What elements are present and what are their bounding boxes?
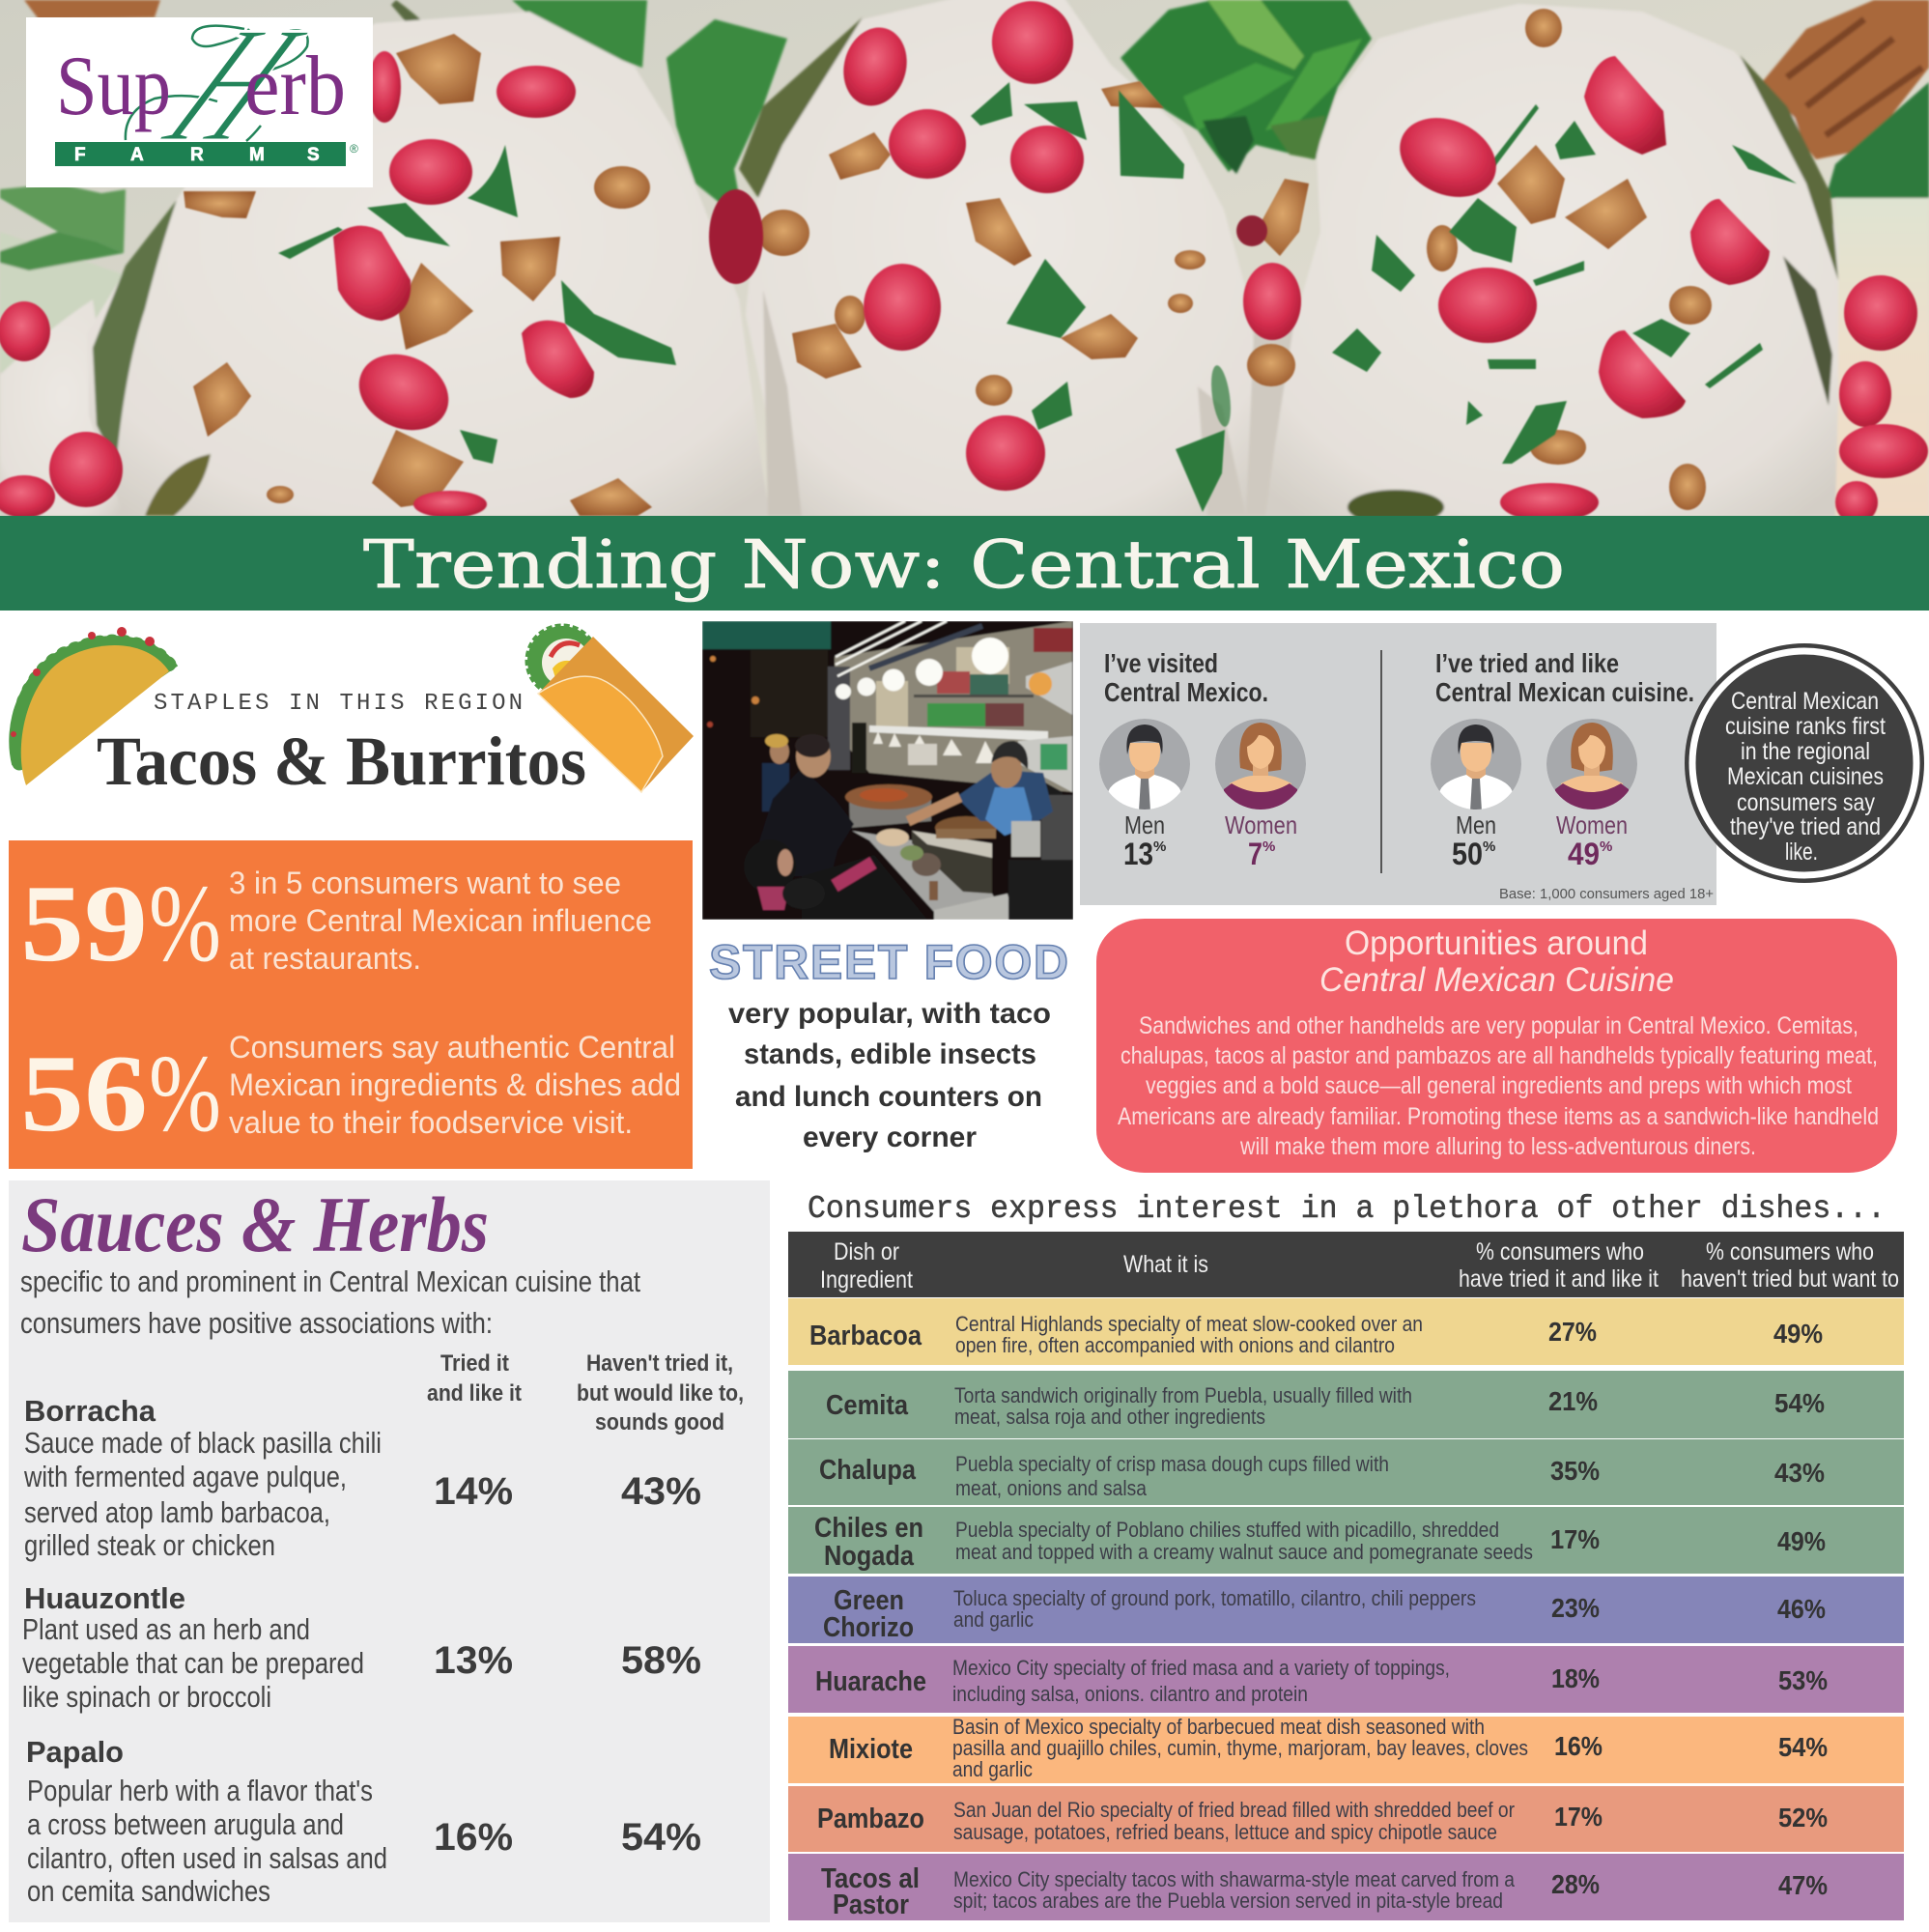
heading: tried and like: I’ve tried and like <box>1435 648 1619 678</box>
row: Huarache: Mexico City specialty of fried masa and a variety of toppings, <box>952 1656 1450 1680</box>
text: street food description: every corner <box>803 1122 977 1153</box>
text: street food description: stands, edible insects <box>744 1038 1036 1070</box>
stat: men visited: % <box>1153 838 1166 855</box>
row: Chalupa: 35% <box>1550 1456 1600 1486</box>
row: Mixiote: Mixiote <box>829 1734 913 1765</box>
row: Huarache: 18% <box>1551 1663 1600 1693</box>
heading: tried and like <box>1435 648 1694 707</box>
callout: ranks first: Mexican cuisines <box>1727 763 1884 790</box>
icon: woman tried <box>1546 719 1637 812</box>
row: Barbacoa: Barbacoa <box>809 1321 922 1351</box>
item: Borracha: 14% <box>434 1470 513 1513</box>
row: Barbacoa: 49% <box>1773 1319 1823 1349</box>
icon: woman visited <box>1215 719 1306 812</box>
chile 3 <box>1261 4 1838 516</box>
heading: Sauces & Herbs <box>21 1180 489 1268</box>
stat: men tried: 50 <box>1452 837 1483 871</box>
row: Mixiote: 54% <box>1778 1732 1828 1762</box>
table header: Ingredient <box>820 1266 913 1293</box>
row: Barbacoa: Central Highlands specialty of meat slow-cooked over an <box>955 1312 1423 1336</box>
item: Papalo: Papalo <box>26 1735 124 1769</box>
item: Papalo: Popular herb with a flavor that's <box>27 1774 373 1807</box>
table header: haven't tried but want to <box>1681 1265 1899 1293</box>
title banner: Trending Now: Central Mexico <box>363 527 1565 604</box>
text: street food description: very popular, with taco <box>728 998 1051 1030</box>
stat: women visited: % <box>1262 838 1275 855</box>
stat: women tried <box>1556 810 1628 871</box>
text: street food description: and lunch counters on <box>735 1081 1042 1113</box>
row: Green Chorizo <box>788 1577 1904 1643</box>
heading: other dishes: Consumers express interest in a plethora of other dishes... <box>808 1191 1886 1227</box>
row: Tacos al Pastor: 47% <box>1778 1870 1828 1900</box>
row: Tacos al Pastor: Mexico City specialty tacos with shawarma-style meat carved from a <box>953 1867 1516 1891</box>
item: Borracha: Borracha <box>24 1394 156 1428</box>
item: Huauzontle <box>22 1581 701 1714</box>
row: Chalupa: Puebla specialty of crisp masa dough cups filled with <box>955 1452 1389 1476</box>
row: Pambazo: 52% <box>1778 1803 1828 1833</box>
row: Pambazo: 17% <box>1554 1802 1603 1832</box>
stat 59%: 3 in 5 consumers want to see <box>229 866 621 900</box>
stat 59%: % <box>149 862 221 984</box>
heading: staples: STAPLES IN THIS REGION <box>154 691 523 717</box>
row: Cemita: Cemita <box>826 1390 909 1421</box>
item: Huauzontle: like spinach or broccoli <box>22 1680 271 1714</box>
row: Green Chorizo: Toluca specialty of ground pork, tomatillo, cilantro, chili peppers <box>953 1586 1476 1610</box>
item: Papalo <box>26 1735 701 1908</box>
stat: men tried <box>1452 810 1496 871</box>
item: Borracha: served atop lamb barbacoa, <box>24 1495 330 1529</box>
stat 59%: at restaurants. <box>229 941 421 976</box>
row: Cemita <box>788 1371 1904 1438</box>
item: Borracha <box>23 1394 701 1562</box>
row: Mixiote: pasilla and guajillo chiles, cumin, thyme, marjoram, bay leaves, cloves <box>952 1736 1528 1760</box>
sauce piece far left <box>0 299 126 516</box>
row: Chiles en Nogada: Chiles en <box>814 1513 923 1544</box>
chile 1 <box>87 12 770 516</box>
row: Pambazo: sausage, potatoes, refried beans, lettuce and spicy chipotle sauce <box>953 1820 1497 1844</box>
row: Chalupa: 43% <box>1774 1458 1825 1488</box>
base note: Base: 1,000 consumers aged 18+ <box>1499 886 1714 902</box>
row: Green Chorizo: 46% <box>1777 1594 1826 1624</box>
row: Huarache: including salsa, onions. cilantro and protein <box>952 1682 1308 1706</box>
callout: ranks first: consumers say <box>1737 789 1875 816</box>
table header <box>788 1232 1904 1297</box>
table header: have tried it and like it <box>1459 1265 1659 1293</box>
chile 2 <box>746 0 1266 516</box>
row: Mixiote <box>788 1715 1904 1783</box>
logo: SupHerb Farms: Sup <box>56 40 171 133</box>
heading: visited <box>1104 648 1268 707</box>
stat: women tried: % <box>1600 838 1612 855</box>
item: Papalo: cilantro, often used in salsas and <box>27 1841 387 1875</box>
stat: women visited <box>1225 810 1297 871</box>
text: street food description <box>728 998 1051 1153</box>
stat: women visited: Women <box>1225 810 1297 839</box>
item: Papalo: a cross between arugula and <box>27 1807 344 1841</box>
callout: ranks first: cuisine ranks first <box>1725 713 1886 740</box>
panel: consumer stats <box>9 840 693 1169</box>
stat 56%: Mexican ingredients & dishes add <box>229 1067 681 1102</box>
row: Tacos al Pastor <box>788 1854 1904 1920</box>
stat: men visited: 13 <box>1123 837 1153 871</box>
icon: man visited <box>1099 719 1190 812</box>
stat: women tried: Women <box>1556 810 1628 839</box>
panel: opportunities: Central Mexican Cuisine <box>1319 961 1674 999</box>
intro text: specific to and prominent in Central Mexican cuisine that <box>20 1264 640 1298</box>
row: Pambazo <box>788 1786 1904 1852</box>
intro text <box>20 1264 640 1340</box>
row: Chiles en Nogada: meat and topped with a creamy walnut sauce and pomegranate seeds <box>955 1540 1533 1564</box>
stat: men visited <box>1123 810 1166 871</box>
callout: ranks first: they've tried and <box>1730 813 1881 840</box>
logo: SupHerb Farms <box>26 0 373 187</box>
row: Barbacoa: 27% <box>1548 1317 1597 1347</box>
title banner <box>0 516 1929 611</box>
row: Chiles en Nogada: Nogada <box>824 1541 915 1572</box>
column headers: sounds good <box>595 1409 724 1435</box>
row: Green Chorizo: 23% <box>1551 1593 1600 1623</box>
stat 59%: more Central Mexican influence <box>229 903 652 938</box>
logo: SupHerb Farms: FARMS <box>74 145 320 165</box>
callout: ranks first <box>1685 643 1924 883</box>
row: Cemita: 21% <box>1548 1386 1598 1416</box>
heading: visited: I’ve visited <box>1104 648 1218 678</box>
hero photo: chiles en nogada <box>0 0 1929 525</box>
heading: tried and like: Central Mexican cuisine. <box>1435 677 1694 707</box>
icon: man tried <box>1431 719 1521 812</box>
icon: taco <box>11 627 173 785</box>
callout: ranks first: like. <box>1785 838 1818 866</box>
stat: men tried: Men <box>1456 810 1496 839</box>
row: Pambazo: San Juan del Rio specialty of fried bread filled with shredded beef or <box>953 1798 1515 1822</box>
row: Mixiote: Basin of Mexico specialty of barbecued meat dish seasoned with <box>952 1715 1485 1739</box>
row: Pambazo: Pambazo <box>817 1804 924 1834</box>
row: Huarache: Huarache <box>815 1666 926 1697</box>
photo: street food stall <box>702 621 1073 920</box>
row: Tacos al Pastor: spit; tacos arabes are the Puebla version served in pita-style bread <box>953 1889 1503 1913</box>
row: Cemita: Torta sandwich originally from Puebla, usually filled with <box>954 1383 1412 1407</box>
item: Huauzontle: Plant used as an herb and <box>22 1612 310 1646</box>
row: Chalupa: meat, onions and salsa <box>955 1476 1148 1500</box>
item: Huauzontle: vegetable that can be prepared <box>22 1646 364 1680</box>
heading: staples <box>97 691 586 800</box>
column headers: Haven't tried it, <box>586 1350 733 1377</box>
stat 56%: Consumers say authentic Central <box>229 1030 675 1065</box>
item: Borracha: with fermented agave pulque, <box>23 1460 347 1493</box>
heading: staples: Tacos & Burritos <box>97 723 586 800</box>
row: Chiles en Nogada: 17% <box>1550 1524 1600 1554</box>
stat: women tried: 49 <box>1568 837 1600 871</box>
row: Tacos al Pastor: Pastor <box>833 1889 909 1920</box>
heading: visited: Central Mexico. <box>1104 677 1268 707</box>
row: Huarache <box>788 1646 1904 1713</box>
row: Tacos al Pastor: Tacos al <box>821 1863 920 1894</box>
item: Papalo: on cemita sandwiches <box>27 1874 270 1908</box>
row: Chalupa: Chalupa <box>819 1455 917 1486</box>
stat 59% <box>20 862 652 984</box>
item: Borracha: Sauce made of black pasilla chili <box>24 1426 382 1460</box>
table header: % consumers who <box>1706 1238 1874 1265</box>
stat: women visited: 7 <box>1248 837 1262 871</box>
logo: SupHerb Farms: ® <box>350 142 358 156</box>
panel: sauces and herbs <box>9 1180 770 1922</box>
stat: men visited: Men <box>1124 810 1165 839</box>
panel: opportunities: will make them more alluring to less-adventurous diners. <box>1239 1133 1756 1160</box>
row: Mixiote: 16% <box>1554 1731 1603 1761</box>
stat 56% <box>20 1030 681 1154</box>
row: Cemita: meat, salsa roja and other ingredients <box>954 1405 1265 1429</box>
item: Papalo: 54% <box>621 1816 701 1859</box>
row: Chiles en Nogada <box>788 1507 1904 1574</box>
column headers <box>427 1350 744 1435</box>
column headers: Tried it <box>440 1350 509 1377</box>
heading: street food: STREET FOOD <box>709 935 1068 989</box>
item: Huauzontle: 58% <box>621 1639 701 1682</box>
intro text: consumers have positive associations with: <box>20 1306 493 1340</box>
row: Mixiote: and garlic <box>952 1757 1033 1781</box>
row: Tacos al Pastor: 28% <box>1551 1869 1600 1899</box>
row: Barbacoa <box>788 1298 1904 1365</box>
table header: % consumers who <box>1476 1238 1644 1265</box>
icon: burrito <box>527 626 694 792</box>
row: Huarache: 53% <box>1778 1665 1828 1695</box>
row: Green Chorizo: Chorizo <box>823 1612 914 1643</box>
item: Huauzontle: 13% <box>434 1639 513 1682</box>
row: Barbacoa: open fire, often accompanied with onions and cilantro <box>955 1333 1395 1357</box>
stat 59%: 59 <box>20 862 148 984</box>
row: Cemita: 54% <box>1774 1388 1825 1418</box>
row: Green Chorizo: and garlic <box>953 1607 1034 1632</box>
panel: opportunities: Opportunities around <box>1345 924 1648 962</box>
stat 56%: value to their foodservice visit. <box>229 1105 633 1140</box>
table: dishes <box>788 1232 1904 1920</box>
row: Chiles en Nogada: Puebla specialty of Poblano chilies stuffed with picadillo, shredded <box>955 1518 1499 1542</box>
column headers: but would like to, <box>577 1380 744 1406</box>
column headers: and like it <box>427 1380 522 1406</box>
callout: ranks first: Central Mexican <box>1731 688 1879 715</box>
table header: What it is <box>1123 1251 1208 1278</box>
table header: Dish or <box>834 1238 899 1265</box>
callout: ranks first: in the regional <box>1741 738 1870 765</box>
row: Green Chorizo: Green <box>834 1585 904 1616</box>
stat 56%: % <box>149 1032 221 1154</box>
row: Chalupa <box>788 1439 1904 1505</box>
panel: consumer survey <box>1080 623 1716 905</box>
stat 56%: 56 <box>20 1032 148 1154</box>
item: Borracha: grilled steak or chicken <box>24 1528 275 1562</box>
item: Huauzontle: Huauzontle <box>24 1581 185 1615</box>
stat: men tried: % <box>1483 838 1495 855</box>
row: Chiles en Nogada: 49% <box>1777 1526 1826 1556</box>
item: Borracha: 43% <box>621 1470 701 1513</box>
logo: SupHerb Farms: erb <box>244 40 346 133</box>
item: Papalo: 16% <box>434 1816 513 1859</box>
panel: opportunities <box>1096 919 1897 1173</box>
